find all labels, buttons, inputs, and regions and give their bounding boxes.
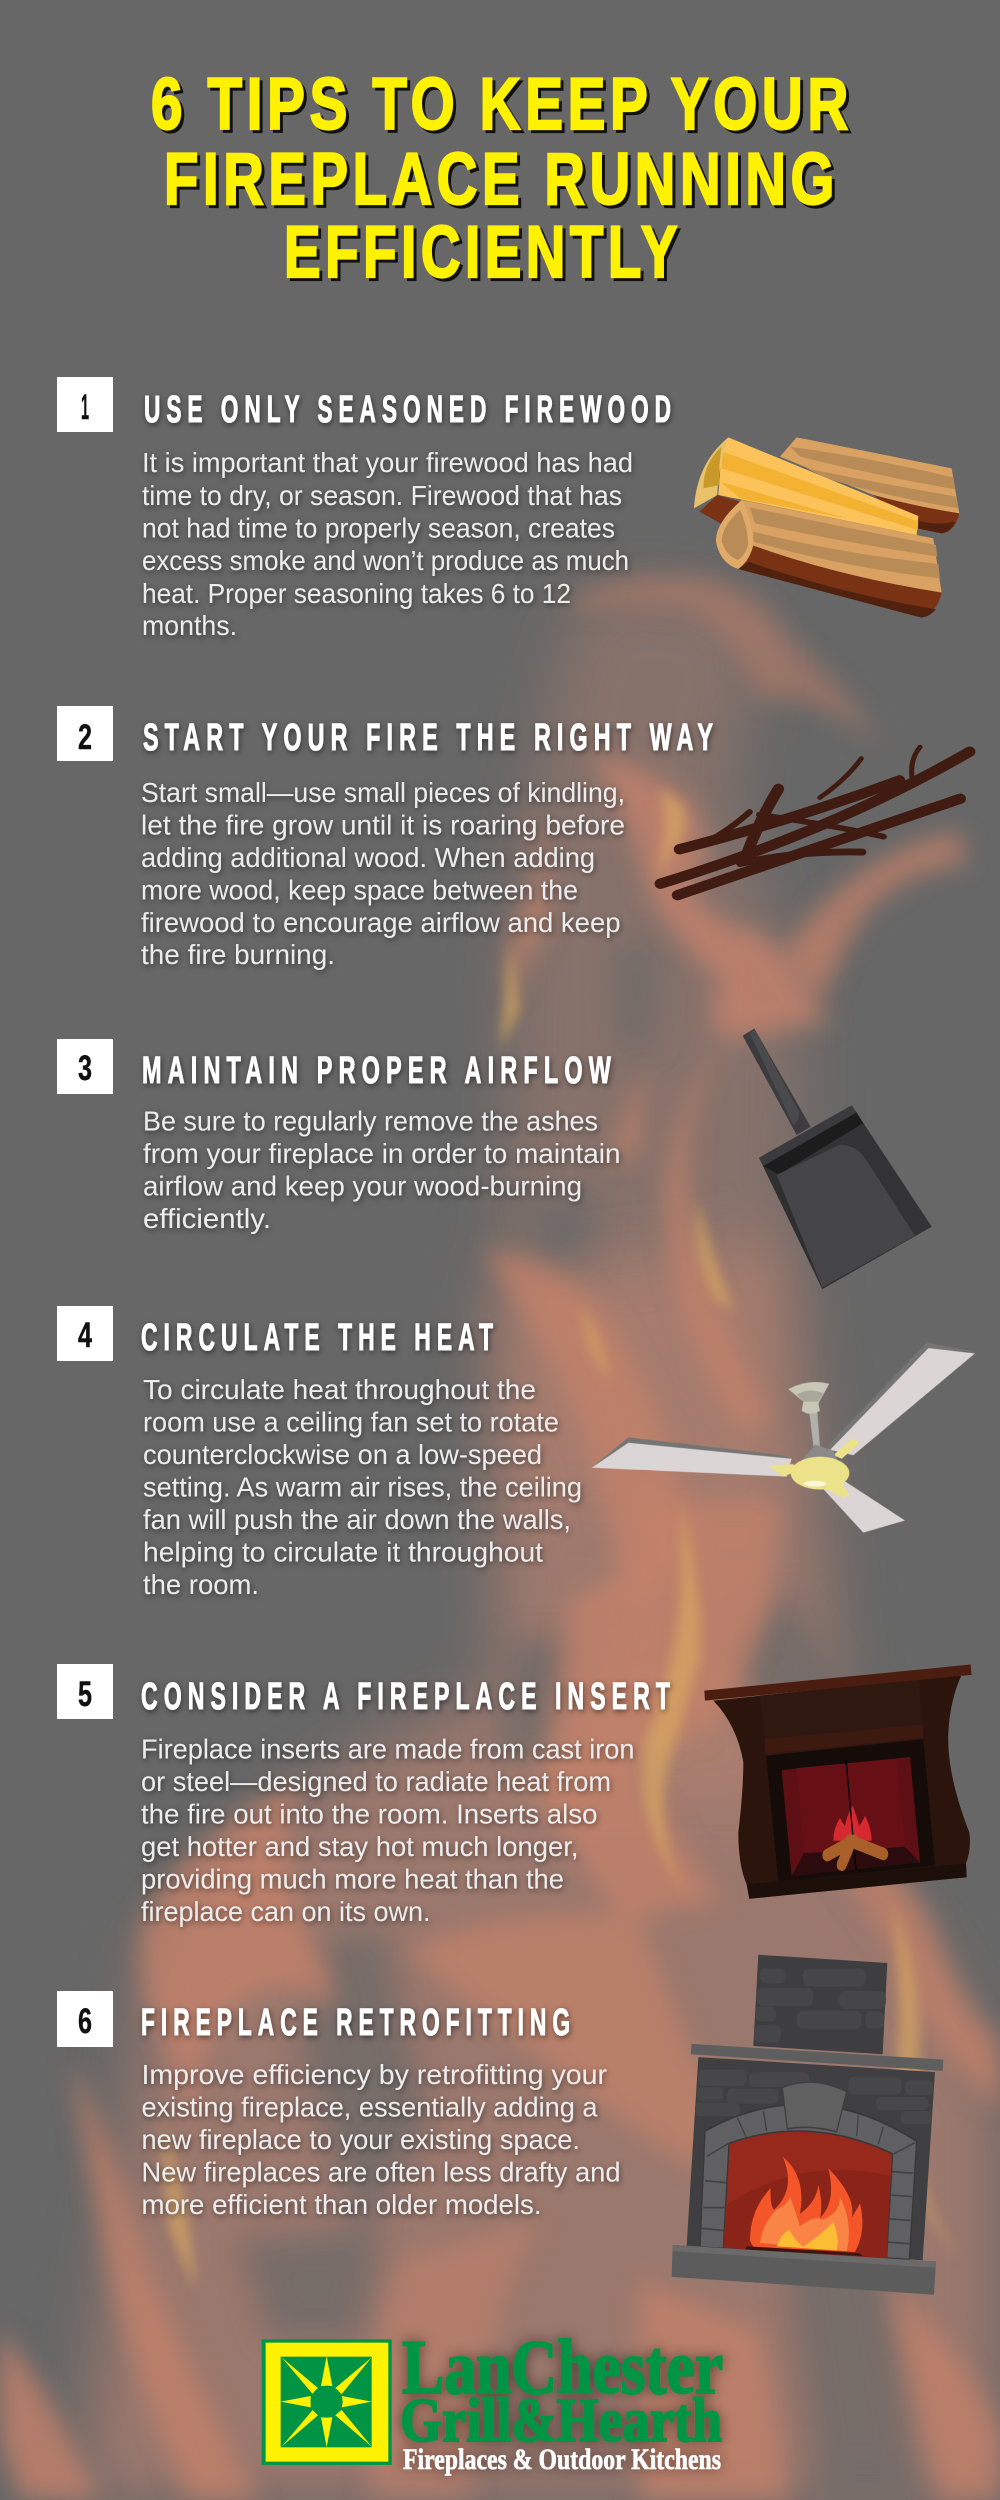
tip 3 panel (57, 1029, 932, 1289)
logo wordmark: LanChester (402, 2324, 723, 2410)
text 2: more wood, keep space between the (141, 874, 578, 906)
text 4: room use a ceiling fan set to rotate (143, 1406, 559, 1438)
text 3 (143, 1106, 620, 1234)
text 6: more efficient than older models. (142, 2189, 542, 2220)
number badge 4 (57, 1306, 113, 1361)
title (151, 64, 856, 296)
text 5: fireplace can on its own. (141, 1896, 430, 1927)
text 2: the fire burning. (141, 939, 335, 970)
text 3: airflow and keep your wood-burning (143, 1170, 582, 1202)
logo mark: sun square (262, 2339, 392, 2465)
tip 2 panel (57, 706, 970, 970)
text 2: adding additional wood. When adding (141, 842, 595, 873)
text 1: not had time to properly season, creates (142, 512, 615, 544)
number badge 6 (57, 1991, 113, 2047)
number badge 2 (57, 706, 113, 761)
icon: kindling sticks (660, 747, 970, 895)
heading 6: FIREPLACE RETROFITTING (141, 2002, 576, 2044)
text 2: Start small—use small pieces of kindling, (141, 777, 625, 808)
text 4 (143, 1374, 582, 1600)
number badge 1 (57, 377, 113, 432)
tip 5 panel (57, 1664, 972, 1927)
text 3: efficiently. (143, 1203, 271, 1234)
icon: firewood logs (694, 437, 959, 618)
logo wordmark (400, 2324, 723, 2476)
logo (262, 2324, 723, 2476)
heading 3: MAINTAIN PROPER AIRFLOW (142, 1050, 617, 1092)
text 5: or steel—designed to radiate heat from (141, 1766, 611, 1797)
text 4: To circulate heat throughout the (143, 1374, 536, 1405)
text 6 (142, 2059, 620, 2220)
tip 6 panel (57, 1955, 943, 2295)
heading 5: CONSIDER A FIREPLACE INSERT (141, 1676, 676, 1718)
text 5: Fireplace inserts are made from cast iron (141, 1734, 634, 1764)
text 4: the room. (143, 1569, 259, 1600)
number badge 5 (57, 1664, 113, 1719)
text 6: new fireplace to your existing space. (142, 2124, 580, 2155)
title: EFFICIENTLY (287, 215, 685, 296)
icon: fireplace insert (704, 1665, 972, 1899)
text 5: the fire out into the room. Inserts also (141, 1798, 598, 1830)
text 5: get hotter and stay hot much longer, (141, 1831, 578, 1862)
title: EFFICIENTLY (284, 212, 682, 293)
text 1: time to dry, or season. Firewood that has (142, 480, 622, 511)
tip 1 panel (57, 377, 959, 641)
text 2 (141, 777, 625, 970)
text 3: from your fireplace in order to maintain (143, 1138, 620, 1169)
text 2: let the fire grow until it is roaring before (141, 810, 625, 840)
text 5 (141, 1734, 634, 1927)
icon: ceiling fan (592, 1343, 975, 1533)
text 4: counterclockwise on a low-speed (143, 1439, 542, 1470)
text 6: New fireplaces are often less drafty and (142, 2156, 620, 2188)
number badge 3: 3 (78, 1049, 92, 1088)
text 4: helping to circulate it throughout (143, 1536, 543, 1568)
number badge 4: 4 (78, 1316, 92, 1355)
text 2: firewood to encourage airflow and keep (141, 907, 620, 938)
icon: ash shovel (743, 1029, 932, 1289)
tip 4 panel (57, 1306, 975, 1600)
text 1: excess smoke and won’t produce as much (142, 545, 629, 576)
icon: stone fireplace (672, 1955, 943, 2295)
number badge 2: 2 (78, 718, 92, 757)
text 1: months. (142, 610, 237, 641)
text 1: heat. Proper seasoning takes 6 to 12 (142, 578, 571, 609)
text 4: fan will push the air down the walls, (143, 1504, 571, 1535)
text 3: Be sure to regularly remove the ashes (143, 1106, 598, 1136)
background: blurred flames (0, 576, 1000, 2500)
text 1: It is important that your firewood has had (142, 447, 633, 478)
number badge 1: 1 (81, 388, 89, 427)
number badge 3 (57, 1039, 113, 1094)
text 1 (142, 447, 633, 641)
text 4: setting. As warm air rises, the ceiling (143, 1472, 582, 1502)
number badge 5: 5 (78, 1675, 92, 1714)
logo wordmark: Grill&Hearth (400, 2387, 722, 2455)
text 6: existing fireplace, essentially adding a (142, 2092, 598, 2122)
text 5: providing much more heat than the (141, 1864, 564, 1894)
logo wordmark: Fireplaces & Outdoor Kitchens (403, 2443, 721, 2476)
heading 4: CIRCULATE THE HEAT (141, 1317, 499, 1359)
number badge 6: 6 (78, 2002, 92, 2041)
text 6: Improve efficiency by retrofitting your (142, 2059, 607, 2090)
